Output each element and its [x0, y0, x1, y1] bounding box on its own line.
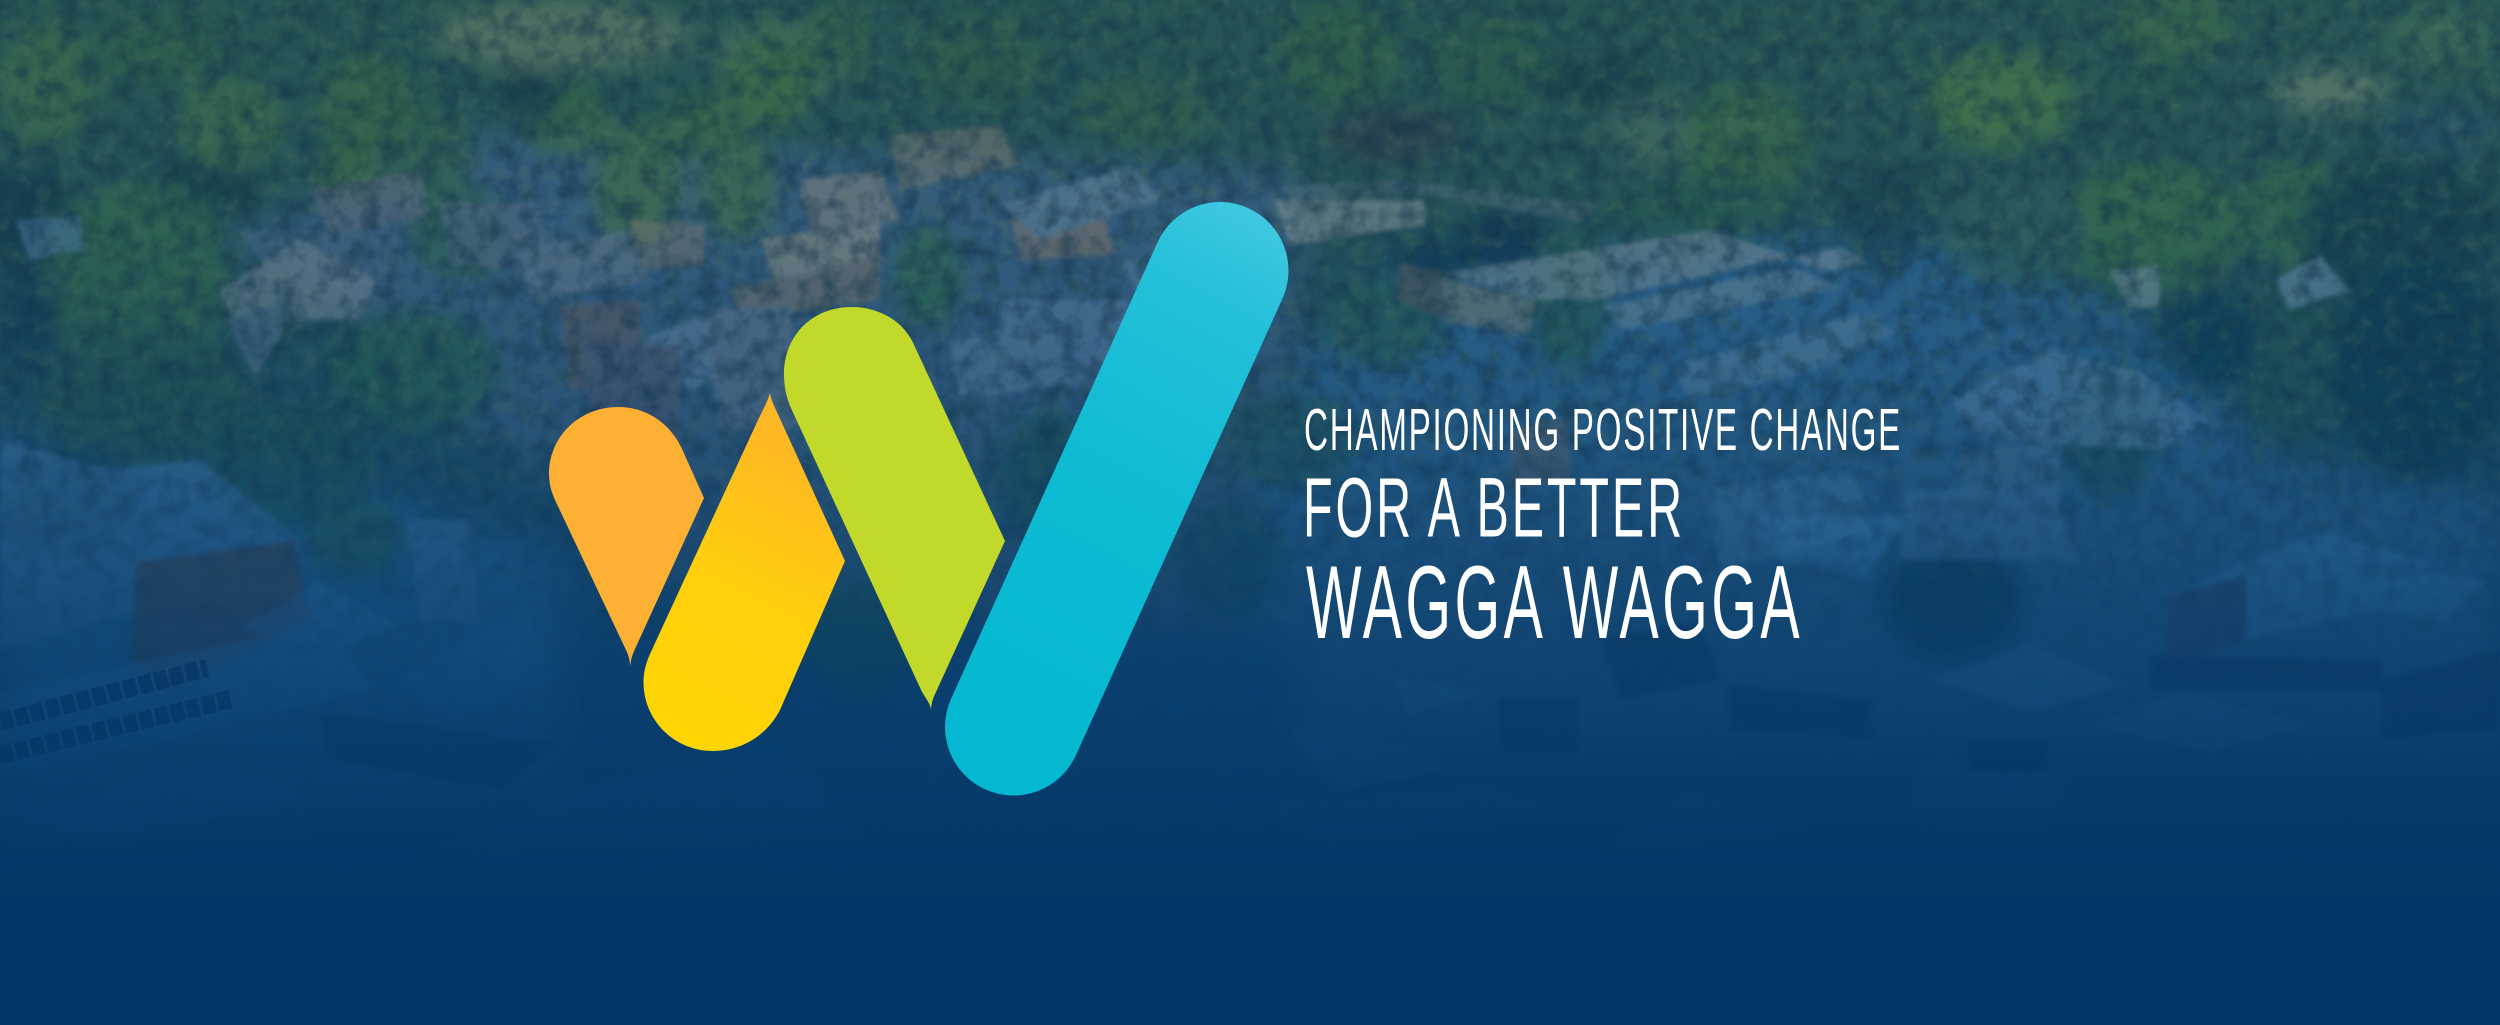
background: aerial photograph of town under navy tint: [0, 0, 2500, 780]
tagline line 1: CHAMPIONING POSITIVE CHANGE: [1304, 397, 1902, 463]
logo stroke: cyan: [1014, 270, 1220, 727]
solar panels: [0, 668, 231, 755]
banner: [0, 0, 2500, 796]
light foliage texture: [0, 0, 2500, 494]
tagline line 3: WAGGA WAGGA: [1306, 545, 1803, 661]
logo: stylised W: [549, 270, 1220, 751]
dark foliage and roof texture: [0, 0, 2500, 603]
town districts: [0, 130, 2500, 840]
logo stroke: lime green: [784, 307, 1005, 711]
lower rooftops fading into navy: [0, 515, 2500, 862]
logo stroke: yellow: [644, 393, 845, 751]
logo stroke: orange: [549, 407, 704, 666]
town buildings: [0, 125, 2350, 690]
tagline line 2: FOR A BETTER: [1303, 460, 1685, 554]
tagline: [1303, 397, 1902, 661]
